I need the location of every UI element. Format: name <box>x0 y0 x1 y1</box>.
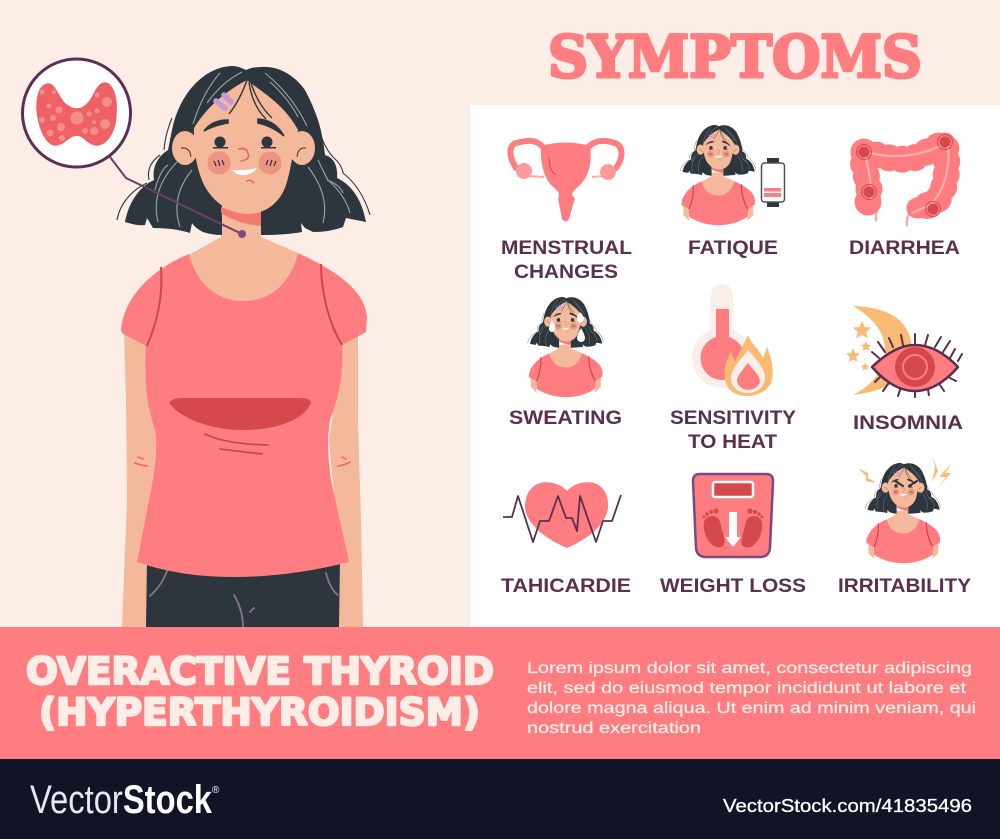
icon: flame <box>724 335 773 396</box>
light hair strands <box>155 72 350 227</box>
footer bar <box>0 759 1000 839</box>
heading: overactive thyroid <box>26 650 494 734</box>
icon: thyroid gland <box>37 83 116 145</box>
heading: overactive thyroid: (HYPERTHYROIDISM) <box>39 691 480 734</box>
icon: sweating woman <box>528 297 604 397</box>
symptom: irritability <box>838 458 971 597</box>
eyes <box>213 136 276 148</box>
text block: description: dolore magna aliqua. Ut enim ad minim veniam, qui <box>527 700 976 717</box>
text block: description: elit, sed do eiusmod tempor incididunt ut labore et <box>527 680 967 697</box>
pants <box>146 560 340 627</box>
label: FATIQUE <box>688 237 778 259</box>
title: symptoms: SYMPTOMS <box>548 23 922 91</box>
symptom: menstrual changes <box>501 141 632 283</box>
footer image id: VectorStock.com/41835496 <box>723 796 972 816</box>
hair clip <box>216 95 231 108</box>
leader line <box>110 157 242 234</box>
label: MENSTRUAL <box>501 237 632 259</box>
symptom: fatique <box>680 125 784 259</box>
pointer dot <box>238 230 246 238</box>
label: TAHICARDIE <box>501 575 631 597</box>
symptom: tahicardie <box>501 482 631 597</box>
registered mark: ® <box>212 785 220 796</box>
label: SWEATING <box>509 407 622 429</box>
icon: moon and stars <box>846 306 912 395</box>
mouth <box>232 168 257 175</box>
label: DIARRHEA <box>849 237 960 259</box>
main woman figure <box>117 66 370 627</box>
icon: scale <box>693 474 773 557</box>
shirt <box>121 253 367 577</box>
symptom: weight loss <box>660 474 806 597</box>
icon: colon <box>856 134 952 225</box>
cheek hatches <box>214 160 276 166</box>
text block: description: nostrud exercitation <box>527 720 701 737</box>
symptom: sensitivity to heat <box>670 284 796 453</box>
outer hair outline <box>117 118 370 220</box>
face <box>194 80 298 214</box>
symptom: insomnia <box>846 306 963 434</box>
panel: symptoms white area <box>470 105 1000 627</box>
icon: angry woman <box>858 458 952 563</box>
icon: tired woman <box>680 125 756 225</box>
thyroid callout <box>22 59 246 238</box>
label: IRRITABILITY <box>838 575 971 597</box>
ear inner lines <box>181 148 306 157</box>
hair <box>125 66 366 235</box>
footer logo: VectorStock <box>30 778 213 822</box>
magnifier circle <box>22 59 130 167</box>
forehead hair strands <box>229 80 272 119</box>
neck shadow <box>221 207 261 226</box>
arms <box>122 330 363 627</box>
label: SENSITIVITY <box>670 407 796 429</box>
cheeks <box>208 152 282 174</box>
label: WEIGHT LOSS <box>660 575 806 597</box>
label: CHANGES <box>514 261 618 283</box>
heading: overactive thyroid: OVERACTIVE THYROID <box>26 650 494 693</box>
nose and lip <box>239 148 254 183</box>
icon: heart with pulse <box>503 482 621 548</box>
text block: description: Lorem ipsum dolor sit amet, consectetur adipiscing <box>527 660 972 677</box>
ears <box>172 131 315 165</box>
label <box>501 237 632 283</box>
icon: thermometer <box>692 284 752 388</box>
label: INSOMNIA <box>853 412 963 434</box>
arm creases <box>135 457 350 466</box>
label <box>670 407 796 453</box>
head <box>117 66 370 235</box>
label: TO HEAT <box>688 431 777 453</box>
footprints <box>702 508 764 547</box>
banner: bottom pink band <box>0 627 1000 759</box>
icon: low battery <box>762 158 784 207</box>
text block: description <box>527 660 976 737</box>
symptom: diarrhea <box>849 134 960 259</box>
eyebrows <box>204 119 284 136</box>
icon: uterus <box>510 141 622 222</box>
neck and chest <box>189 200 300 310</box>
symptom: sweating <box>509 297 622 429</box>
icon: red eye <box>872 334 962 397</box>
